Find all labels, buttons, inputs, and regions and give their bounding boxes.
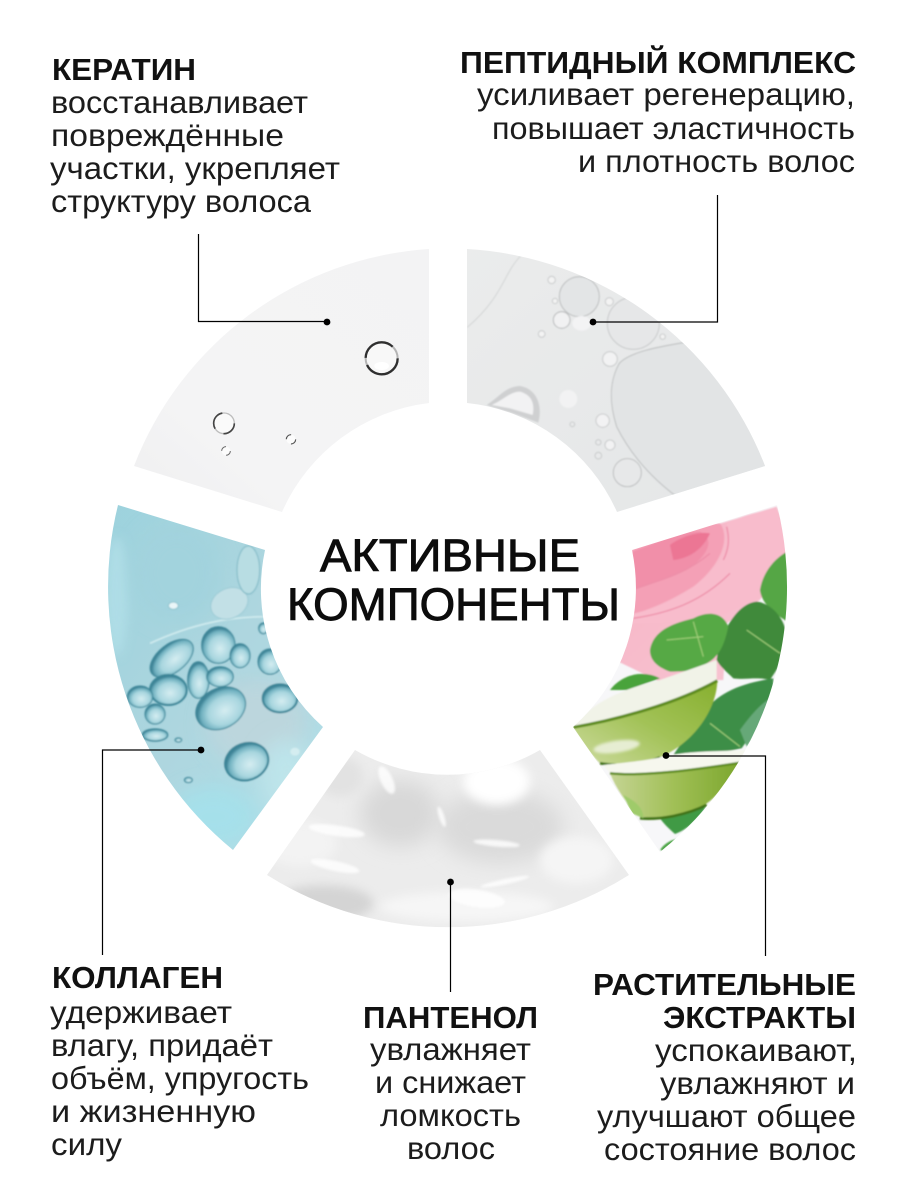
leader line: plant extracts [663,752,766,956]
leader line: keratin [198,234,330,325]
title [287,530,620,630]
rose [618,507,793,682]
large oil cell [610,342,732,494]
text block: collagen: влагу, придаёт [51,1027,273,1063]
text block: panthenol: увлажняет [370,1031,531,1067]
text block: keratin: структуру волоса [51,183,311,219]
leaves [610,550,790,851]
text block: panthenol: ПАНТЕНОЛ [363,1000,538,1035]
text block: plant extracts: успокаивают, [655,1032,857,1068]
text block: panthenol: волос [407,1130,495,1166]
text block: plant extracts: ЭКСТРАКТЫ [663,1000,856,1035]
text block: collagen: удерживает [50,994,232,1030]
text block: peptide complex: ПЕПТИДНЫЙ КОМПЛЕКС [460,44,856,80]
panel: collagen segment [108,505,323,850]
text block: peptide complex: повышает эластичность [492,110,855,146]
text block: plant extracts: улучшают общее [597,1098,856,1134]
text block: collagen [50,960,309,1162]
text block: collagen: объём, упругость [51,1060,309,1096]
icon: small bubble right [286,435,296,444]
text block: plant extracts: состояние волос [604,1131,856,1167]
panel: keratin segment [134,249,429,512]
title: КОМПОНЕНТЫ [287,579,620,630]
blob lower left [487,386,540,423]
text block: panthenol [363,1000,538,1166]
panel: peptide complex segment [467,249,765,512]
water bubbles [127,546,300,786]
text block: keratin [50,52,340,219]
title: АКТИВНЫЕ [320,530,580,581]
leader line: peptide complex [590,195,718,325]
text block: keratin: КЕРАТИН [52,52,196,87]
text block: peptide complex: усиливает регенерацию, [477,76,855,112]
icon: medium bubble [214,413,234,434]
panel: plant extracts segment [573,506,787,852]
leader line: collagen [102,747,204,955]
cream folds [290,762,606,917]
icon: small bubble lower [222,447,230,455]
text block: peptide complex [460,44,856,179]
text block: collagen: КОЛЛАГЕН [52,960,223,995]
text block: keratin: повреждённые [51,117,284,153]
text block: keratin: восстанавливает [51,84,308,120]
text block: keratin: участки, укрепляет [50,150,340,186]
text block: peptide complex: и плотность волос [578,143,855,179]
text block: collagen: и жизненную [51,1093,256,1129]
text block: panthenol: и снижает [375,1064,526,1100]
icon: large bubble [366,342,398,374]
text block: panthenol: ломкость [380,1097,521,1133]
text block: collagen: силу [51,1126,122,1162]
text block: plant extracts: РАСТИТЕЛЬНЫЕ [593,967,856,1002]
water background tones [108,542,303,840]
text block: plant extracts [593,967,857,1167]
bubble cluster [538,276,665,487]
leader line: panthenol [447,879,454,992]
upper curved line [467,256,521,327]
text block: plant extracts: увлажняют и [660,1065,855,1101]
panel: panthenol segment [267,750,629,927]
cream highlights [311,766,527,898]
aloe slices [573,660,747,819]
